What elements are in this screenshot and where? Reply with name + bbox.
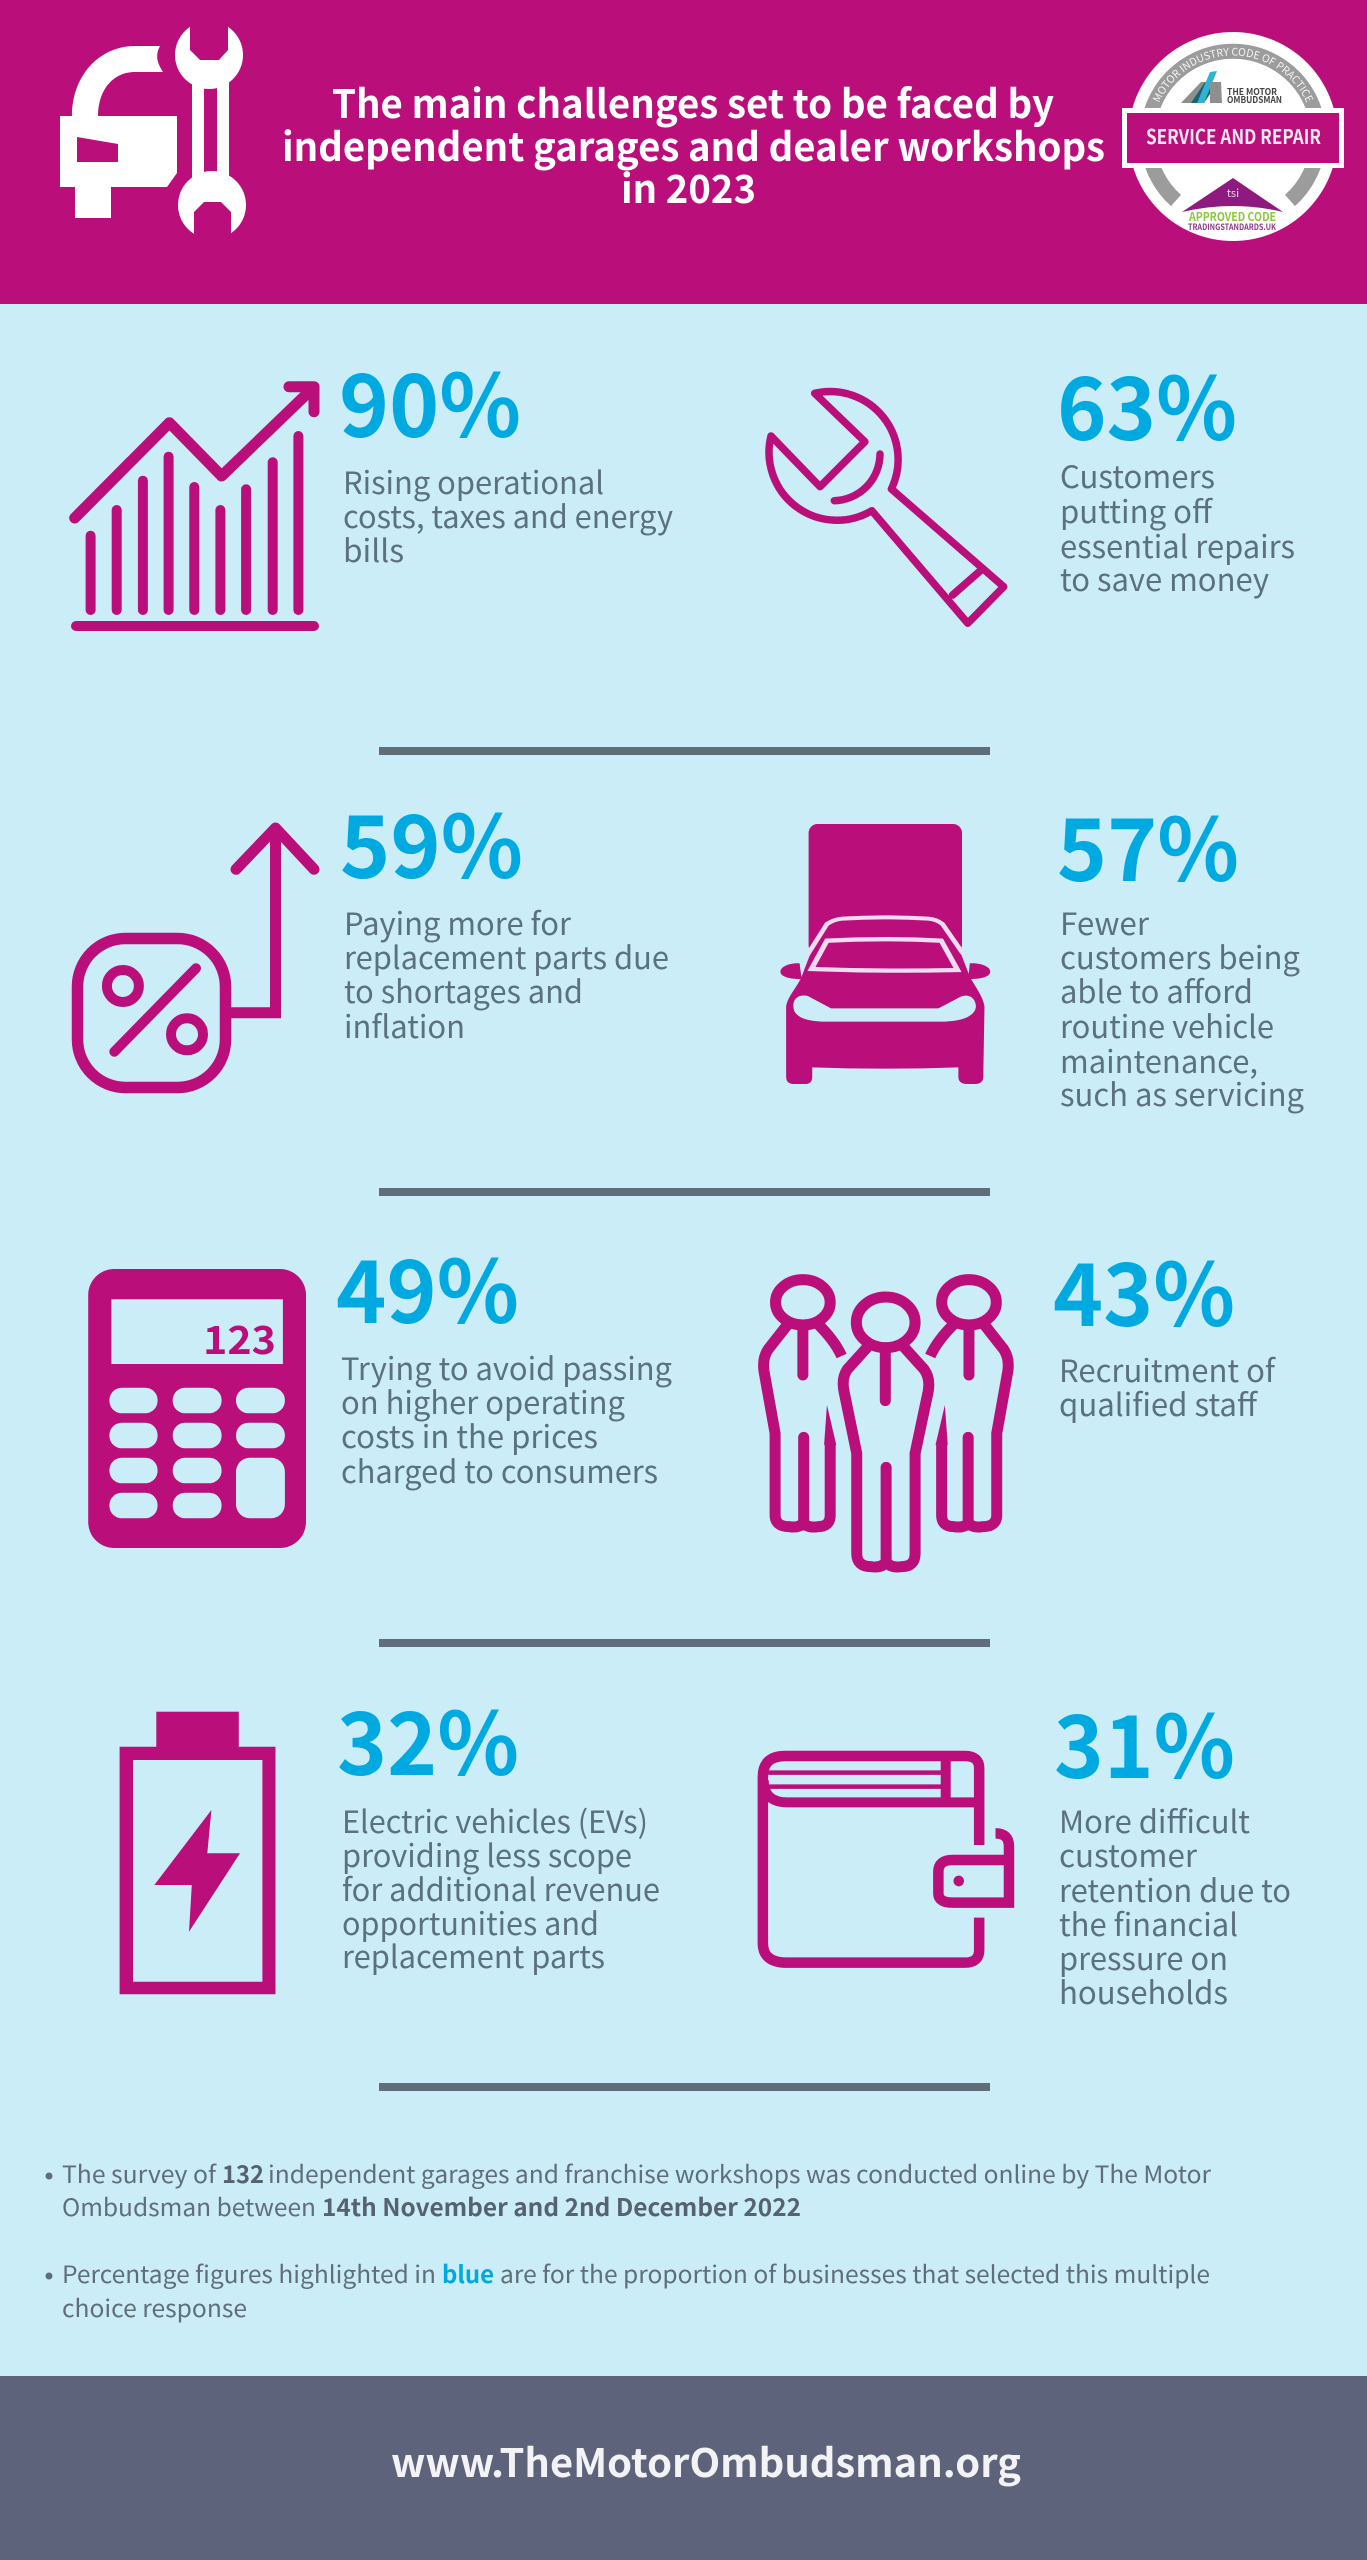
description: Trying to avoid passing: [341, 1344, 673, 1389]
description: Electric vehicles (EVs): [342, 1797, 648, 1842]
description: More difficult: [1059, 1797, 1250, 1842]
description: costs, taxes and energy: [343, 492, 673, 537]
panel: 43% recruitment: [764, 1226, 1277, 1567]
description: households: [1059, 1968, 1228, 2013]
panel: 57% fewer customers afford maintenance: [780, 781, 1305, 1115]
stat: 43%: 43%: [1053, 1226, 1235, 1352]
description: opportunities and: [342, 1899, 599, 1944]
note: survey details: [46, 2155, 1212, 2223]
icon: rising bar chart: [75, 387, 314, 626]
text block: survey notes: [46, 2155, 1212, 2324]
description: retention due to: [1059, 1866, 1291, 1911]
icon: calculator: [88, 1269, 306, 1548]
description: to save money: [1060, 555, 1269, 600]
description: to shortages and: [344, 967, 583, 1012]
description: on higher operating: [341, 1378, 626, 1423]
description: Rising operational: [343, 458, 604, 503]
badge: Motor Industry Code of Practice: THE MOTOR: [1227, 85, 1277, 98]
icon: wrench outline: [769, 392, 1004, 623]
note: percentage explanation: are for the proportion of businesses that selected this multiple: [500, 2255, 1210, 2290]
panel: 59% paying more for parts: [78, 778, 669, 1088]
description: for additional revenue: [342, 1865, 660, 1910]
note: percentage explanation: blue: [442, 2255, 494, 2290]
badge: Motor Industry Code of Practice: OMBUDSMAN: [1227, 93, 1282, 106]
stat: 63%: 63%: [1057, 340, 1237, 466]
description: pressure on: [1059, 1934, 1228, 1979]
title: in 2023: [621, 159, 756, 215]
badge: Motor Industry Code of Practice: MOTOR INDUSTRY CODE OF PRACTICE: [1152, 48, 1314, 103]
badge: Motor Industry Code of Practice: [1122, 32, 1344, 241]
panel: header banner: [0, 0, 1367, 304]
panel: 31% customer retention: [763, 1678, 1291, 2013]
divider 2: [379, 1188, 990, 1196]
description: routine vehicle: [1060, 1002, 1274, 1047]
icon: three people: [764, 1280, 1008, 1567]
description: [342, 1797, 660, 1977]
description: [341, 1344, 673, 1492]
description: [343, 458, 673, 571]
note: survey details: 132: [222, 2155, 264, 2190]
icon: half car and spanner: [60, 20, 246, 242]
stat: 59%: 59%: [340, 778, 523, 904]
description: replacement parts due: [344, 933, 669, 978]
note: percentage explanation: choice response: [62, 2289, 247, 2324]
website address: www.TheMotorOmbudsman.org: [391, 2433, 1021, 2489]
description: Paying more for: [344, 899, 572, 944]
divider 3: [379, 1639, 990, 1647]
description: Customers: [1060, 452, 1215, 497]
description: customer: [1059, 1831, 1198, 1876]
description: [1059, 1346, 1277, 1425]
note: survey details: Ombudsman between: [62, 2188, 316, 2223]
description: such as servicing: [1060, 1070, 1305, 1115]
note: survey details: 14th November and 2nd December 2022: [322, 2188, 801, 2223]
description: [1060, 452, 1295, 600]
badge: Motor Industry Code of Practice: APPROVED CODE: [1188, 208, 1276, 225]
panel: 49% avoiding passing on costs: [88, 1223, 673, 1548]
stat: 32%: 32%: [337, 1675, 519, 1801]
stat: 49%: 49%: [336, 1223, 519, 1349]
title: The main challenges set to be faced by: [332, 74, 1054, 130]
description: [344, 899, 669, 1047]
description: inflation: [344, 1002, 465, 1047]
description: charged to consumers: [341, 1447, 658, 1492]
divider 4: [379, 2083, 990, 2091]
stat: 90%: 90%: [339, 337, 521, 463]
icon: percent with up arrow: [78, 828, 314, 1088]
icon: wallet: [763, 1756, 1009, 1963]
badge: Motor Industry Code of Practice: tsi: [1227, 185, 1239, 201]
stat: 31%: 31%: [1054, 1678, 1235, 1804]
description: putting off: [1060, 487, 1213, 532]
note: percentage explanation: [46, 2255, 1210, 2324]
panel: 90% rising operational costs: [75, 337, 673, 626]
panel: 63% customers putting off repairs: [769, 340, 1295, 623]
description: the financial: [1059, 1900, 1238, 1945]
description: Fewer: [1060, 899, 1150, 944]
stat: 57%: 57%: [1057, 781, 1239, 907]
note: survey details: The survey of: [62, 2155, 217, 2190]
description: customers being: [1060, 933, 1301, 978]
description: replacement parts: [342, 1932, 605, 1977]
divider 1: [379, 747, 990, 755]
note: survey details: independent garages and franchise workshops was conducted online by The Motor: [268, 2155, 1212, 2190]
description: [1060, 899, 1305, 1115]
note: percentage explanation: Percentage figures highlighted in: [62, 2255, 436, 2290]
description: costs in the prices: [341, 1412, 598, 1457]
description: essential repairs: [1060, 522, 1295, 567]
panel: 32% electric vehicles: [120, 1675, 660, 1994]
description: providing less scope: [342, 1831, 632, 1876]
title: [282, 74, 1105, 215]
description: [1059, 1797, 1291, 2013]
description: qualified staff: [1059, 1380, 1258, 1425]
description: maintenance,: [1060, 1037, 1258, 1082]
description: Recruitment of: [1059, 1346, 1277, 1391]
icon: car in front of tall block: [780, 824, 990, 1084]
description: able to afford: [1060, 967, 1253, 1012]
badge: Motor Industry Code of Practice: TRADINGSTANDARDS.UK: [1188, 221, 1276, 233]
panel: footer: [0, 2376, 1367, 2560]
description: bills: [343, 526, 404, 571]
icon: battery with lightning bolt: [120, 1712, 275, 1994]
badge: Motor Industry Code of Practice: SERVICE AND REPAIR: [1146, 121, 1321, 150]
icon: calculator: 123: [203, 1310, 276, 1366]
title: independent garages and dealer workshops: [282, 117, 1105, 173]
